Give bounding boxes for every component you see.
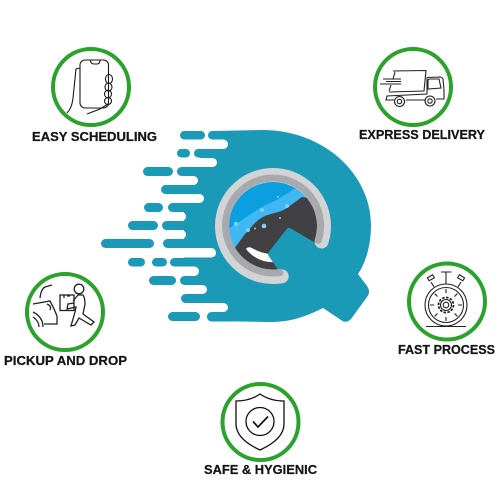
feature: easy scheduling xyxy=(32,49,157,144)
main logo: Q with washing machine door xyxy=(90,130,371,322)
door glass xyxy=(229,182,317,270)
label: FAST PROCESS xyxy=(398,342,495,357)
icon: stopwatch with gear xyxy=(425,272,467,326)
label: EASY SCHEDULING xyxy=(32,129,157,144)
icon circle xyxy=(53,49,129,125)
Q tail wedge xyxy=(271,231,335,295)
icon circle xyxy=(375,49,451,125)
label: EXPRESS DELIVERY xyxy=(359,127,485,142)
feature: safe and hygienic xyxy=(204,384,318,477)
door ring outer xyxy=(222,175,324,277)
icon circle xyxy=(409,264,485,340)
feature: express delivery xyxy=(359,49,485,142)
icon: delivery truck xyxy=(380,70,444,106)
feature: fast process xyxy=(398,264,495,357)
bubbles xyxy=(234,196,289,232)
icon: shield with check xyxy=(236,394,284,450)
speed stripes xyxy=(101,131,238,322)
label: PICKUP AND DROP xyxy=(4,353,127,368)
icon: courier with parcel at car xyxy=(33,284,94,327)
label: SAFE & HYGIENIC xyxy=(204,462,318,477)
door ring inner xyxy=(226,178,321,273)
speed notches xyxy=(90,140,228,312)
icon circle xyxy=(222,384,298,460)
Q body xyxy=(184,130,371,322)
icon: phone in hand xyxy=(67,60,112,114)
icon circle xyxy=(27,274,103,350)
feature: pickup and drop xyxy=(4,274,127,368)
